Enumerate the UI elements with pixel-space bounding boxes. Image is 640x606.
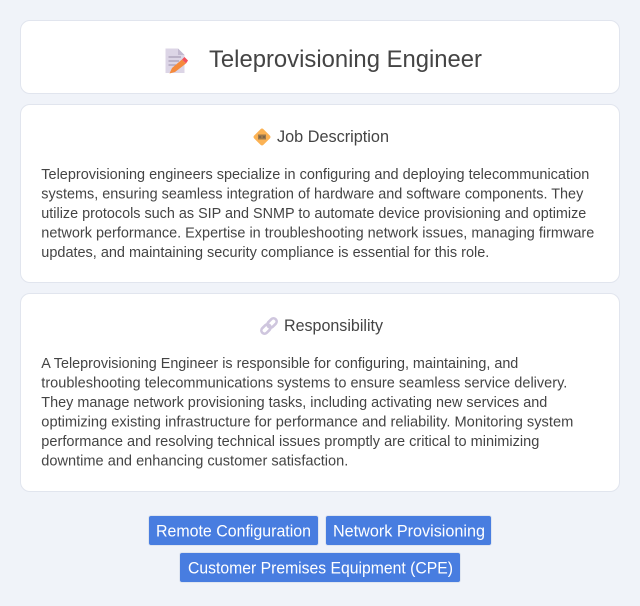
- text block: job description: utilize protocols such as SIP and SNMP to automate device provisioning and optimize: [41, 206, 586, 222]
- panel: job description: [20, 104, 620, 283]
- tag: remote configuration: Remote Configuration: [156, 522, 311, 540]
- text block: responsibility: A Teleprovisioning Engineer is responsible for configuring, maintaining, and: [41, 356, 518, 372]
- text block: job description: network performance. Expertise in troubleshooting network issues, managing firmware: [41, 226, 594, 242]
- icon: document with pencil: [166, 48, 188, 74]
- heading: job description: Job Description: [277, 128, 389, 146]
- panel: title card: [20, 20, 620, 94]
- tag: customer premises equipment: Customer Premises Equipment (CPE): [188, 558, 453, 578]
- text block: job description: [41, 167, 594, 261]
- title: Teleprovisioning Engineer: [209, 46, 482, 73]
- heading: responsibility: Responsibility: [284, 317, 384, 335]
- icon: chain link: [260, 317, 278, 335]
- text block: job description: systems, ensuring seamless integration of hardware and software components. They: [41, 186, 584, 202]
- text block: responsibility: optimizing existing infrastructure for performance and reliability. Monitoring system: [41, 414, 573, 430]
- tag: remote configuration: [148, 515, 319, 546]
- panel: responsibility: [20, 293, 620, 492]
- text block: responsibility: performance and resolving technical issues promptly are critical to minimizing: [41, 434, 539, 450]
- text block: job description: updates, and maintaining security compliance is essential for this role.: [41, 245, 489, 261]
- text block: responsibility: downtime and enhancing customer satisfaction.: [41, 454, 348, 470]
- text block: responsibility: [41, 356, 573, 470]
- icon: orange diamond sign: [254, 128, 270, 146]
- tag: network provisioning: [325, 515, 492, 546]
- text block: responsibility: troubleshooting telecommunications systems to ensure seamless service delivery.: [41, 376, 567, 392]
- tag: network provisioning: Network Provisioning: [333, 522, 485, 540]
- tag: customer premises equipment: [179, 552, 461, 583]
- text block: job description: Teleprovisioning engineers specialize in configuring and deploying telecommunication: [41, 167, 589, 183]
- text block: responsibility: They manage network provisioning tasks, including activating new services and: [41, 395, 547, 411]
